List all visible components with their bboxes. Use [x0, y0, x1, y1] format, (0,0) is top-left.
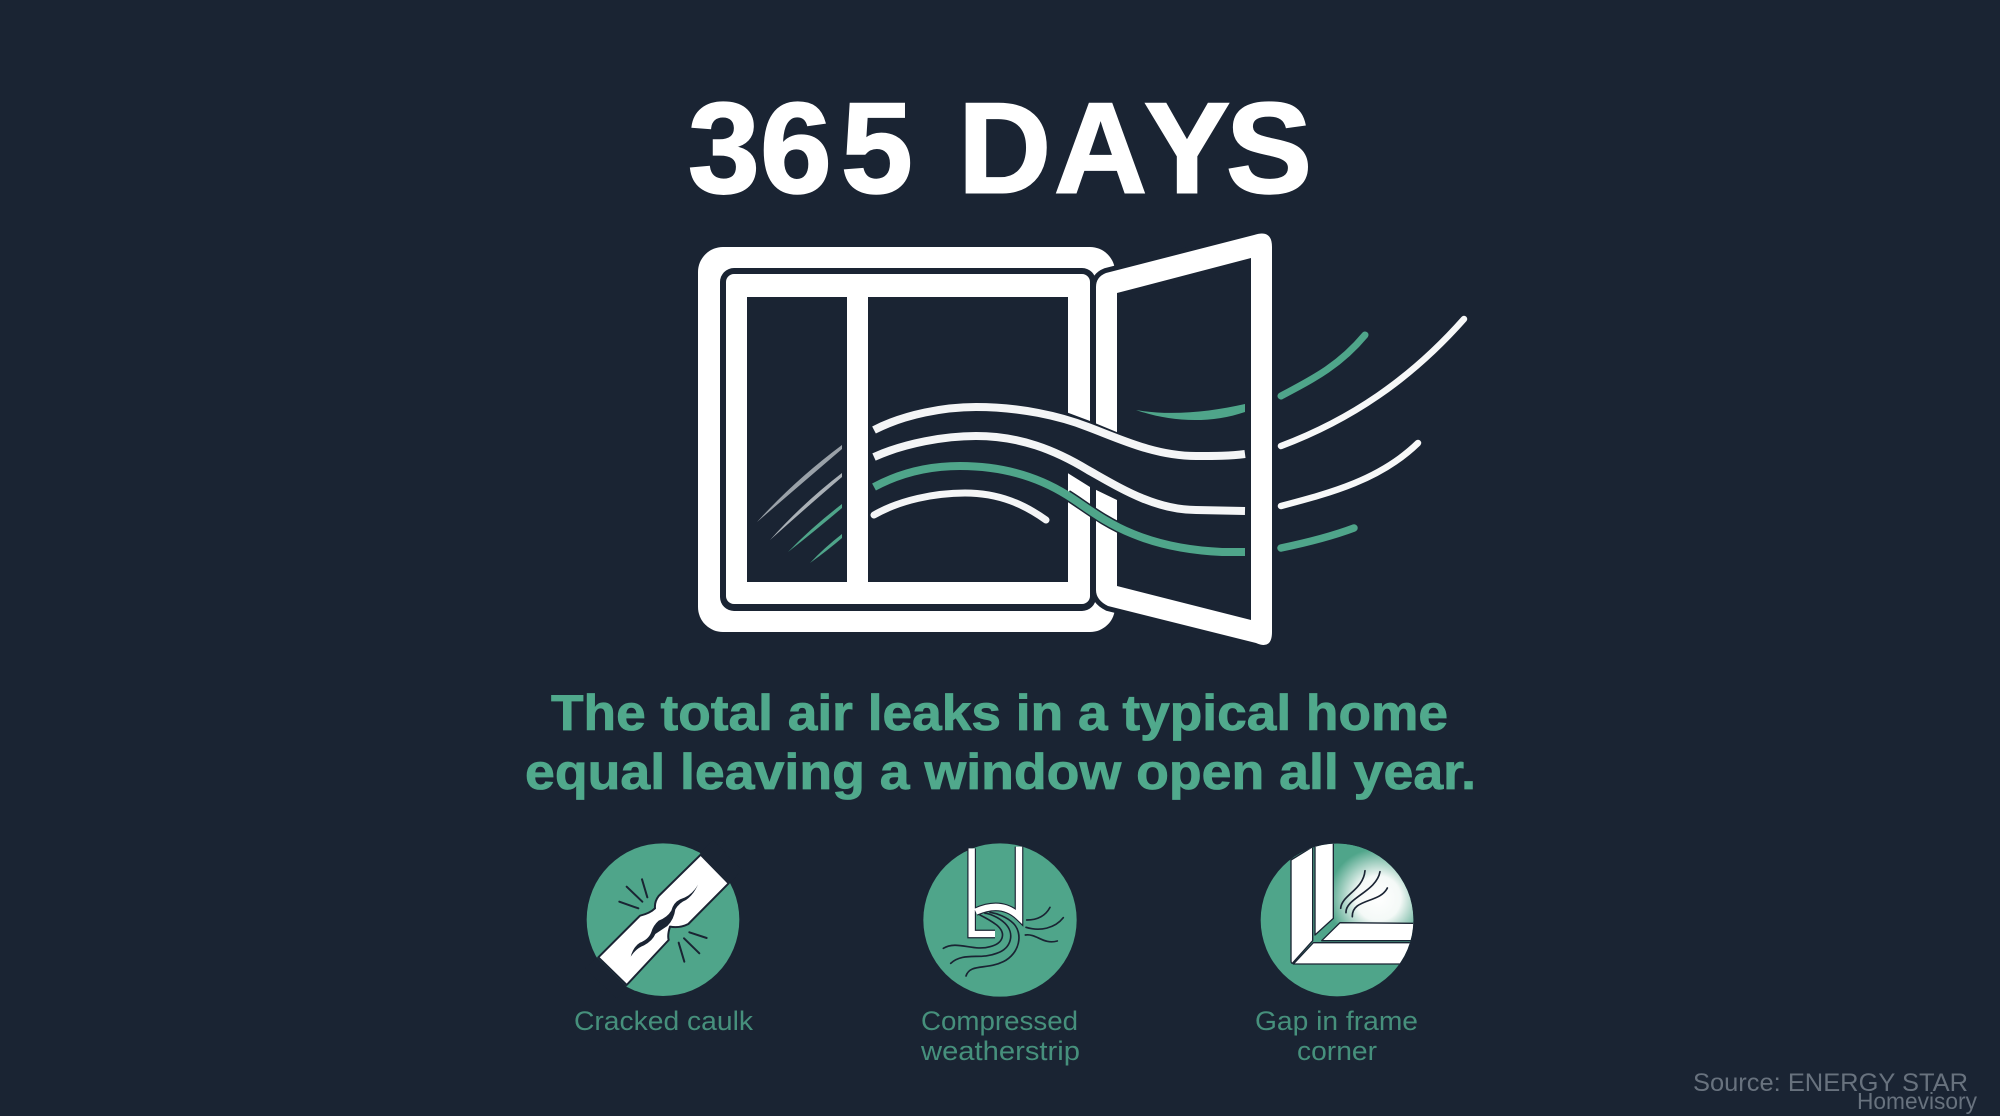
label: gap in frame corner — [1255, 1006, 1418, 1066]
air leak streaks, left pane — [757, 445, 842, 563]
air waves leaving window — [1281, 319, 1464, 548]
label: gap in frame corner: Gap in frame — [1255, 1006, 1418, 1036]
icon: compressed weatherstrip — [923, 843, 1077, 997]
label: compressed weatherstrip: weatherstrip — [920, 1036, 1080, 1066]
icon: cracked caulk — [585, 840, 742, 998]
dark band behind waves — [1066, 412, 1119, 501]
statement text: The total air leaks in a typical home — [551, 685, 1448, 741]
icon: gap in frame corner — [1261, 840, 1417, 996]
label: cracked caulk: Cracked caulk — [574, 1006, 754, 1036]
icon: open window with air flow — [698, 234, 1464, 645]
window frame — [698, 247, 1115, 632]
label: compressed weatherstrip: Compressed — [921, 1006, 1078, 1036]
statement text: equal leaving a window open all year. — [525, 744, 1476, 800]
title: 365 DAYS — [688, 76, 1312, 220]
brand credit: Homevisory — [1857, 1088, 1977, 1114]
air waves through window — [874, 404, 1245, 552]
label: gap in frame corner: corner — [1297, 1036, 1377, 1066]
source credit: Source: ENERGY STAR — [1693, 1069, 1968, 1097]
statement text — [525, 685, 1476, 800]
open sash — [1096, 234, 1272, 645]
label: compressed weatherstrip — [920, 1006, 1080, 1066]
